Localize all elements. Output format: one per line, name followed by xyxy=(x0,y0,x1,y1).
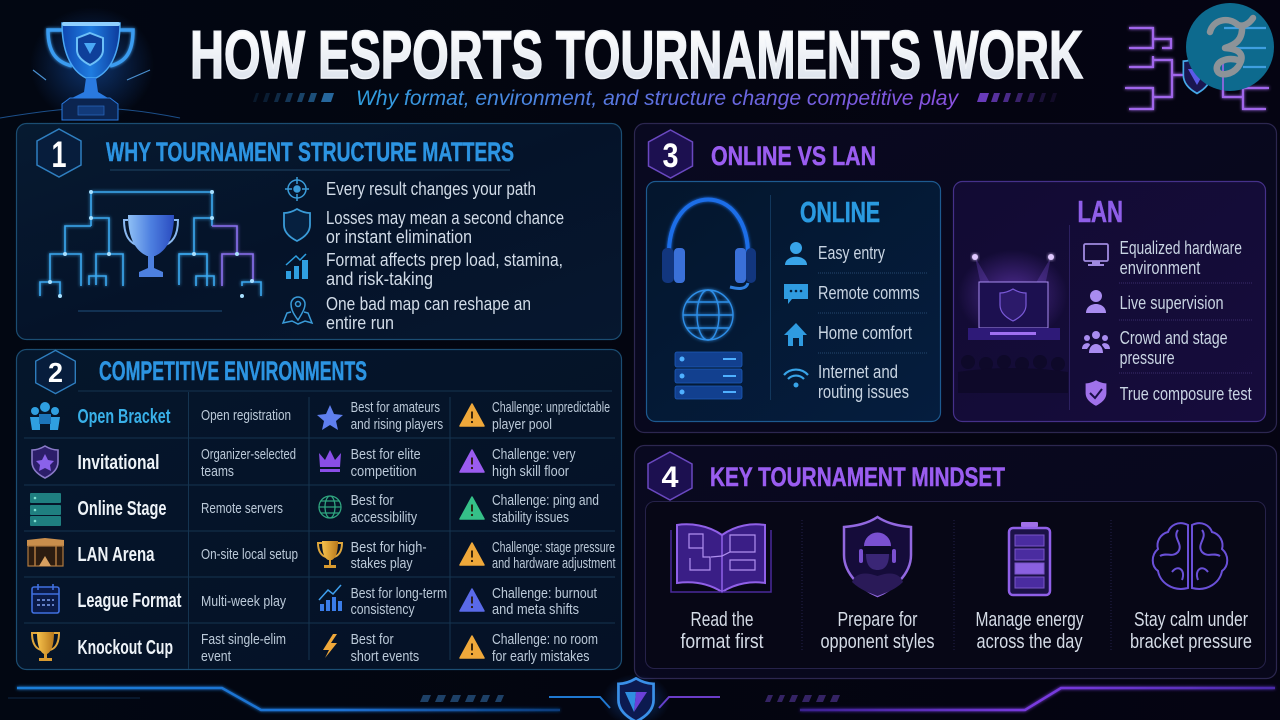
row: league format: Challenge: burnout xyxy=(492,585,598,602)
icon: header trophy xyxy=(0,7,180,123)
LAN item: crowd: pressure xyxy=(1120,348,1175,368)
row: invitational: Best for elite xyxy=(351,446,421,463)
decorative stripes right xyxy=(977,93,1057,102)
text: map: One bad map can reshape an xyxy=(326,293,531,314)
LAN item: crowd: Crowd and stage xyxy=(1120,328,1228,348)
row: LAN arena: stakes play xyxy=(351,555,413,572)
text: format: and risk-taking xyxy=(326,268,433,289)
badge 2 xyxy=(36,350,75,394)
icon: shield xyxy=(284,209,310,241)
icon: server stack xyxy=(30,493,61,526)
illustration: stage xyxy=(958,250,1068,393)
caption: stay calm: Stay calm under xyxy=(1134,608,1248,631)
icon: open book xyxy=(671,524,771,592)
online label: ONLINE xyxy=(800,197,880,229)
online item: internet xyxy=(784,362,909,402)
text: format xyxy=(326,249,563,289)
LAN item: crowd xyxy=(1082,328,1228,368)
caption: read the format: Read the xyxy=(690,608,754,631)
text: losses: Losses may mean a second chance xyxy=(326,207,564,228)
LAN item: composure: True composure test xyxy=(1120,384,1252,404)
panel 2: competitive environments xyxy=(16,350,622,670)
row: LAN arena: Best for high- xyxy=(351,539,427,556)
row: LAN arena: Challenge: stage pressure xyxy=(492,539,615,556)
footer bar xyxy=(8,674,1275,720)
row: invitational: teams xyxy=(201,463,234,480)
icon: star xyxy=(317,405,343,430)
LAN item: composure xyxy=(1086,380,1252,406)
icon: map pin xyxy=(283,297,312,324)
heading 3: ONLINE VS LAN xyxy=(711,141,876,171)
icon: arena building xyxy=(27,538,64,566)
row: online stage: Online Stage xyxy=(78,498,166,520)
text: map xyxy=(326,293,531,333)
card: LAN xyxy=(954,182,1266,422)
icon: players xyxy=(30,402,60,430)
icon: growth chart xyxy=(319,585,342,611)
row: LAN arena: and hardware adjustment xyxy=(492,555,616,572)
online item: internet: routing issues xyxy=(818,382,909,402)
row: open bracket: Best for amateurs xyxy=(351,399,440,416)
badge 1 xyxy=(37,129,81,177)
icon: gold cup xyxy=(32,632,59,661)
badge 2: 2 xyxy=(48,357,63,388)
row: LAN arena: On-site local setup xyxy=(201,546,298,563)
row: online stage xyxy=(30,492,599,526)
text: format: Format affects prep load, stamina, xyxy=(326,249,563,270)
icon: brain xyxy=(1153,523,1227,589)
caption: prepare xyxy=(820,608,934,653)
watermark logo xyxy=(1186,3,1274,97)
row: league format xyxy=(32,584,598,618)
caption: read the format xyxy=(680,608,764,653)
icon: header bracket xyxy=(1125,28,1269,109)
online item: home comfort xyxy=(784,323,912,346)
bracket diagram xyxy=(40,190,261,311)
icon: crown xyxy=(319,450,341,472)
LAN item: hardware: Equalized hardware xyxy=(1120,238,1242,258)
row: invitational: high skill floor xyxy=(492,463,569,480)
icon: calendar xyxy=(32,584,59,613)
icon: battery xyxy=(1009,522,1050,595)
online item: easy entry: Easy entry xyxy=(818,243,885,263)
row: open bracket: player pool xyxy=(492,416,552,433)
row: open bracket: Open Bracket xyxy=(78,406,171,428)
row: knockout cup: Challenge: no room xyxy=(492,631,598,648)
caption: stay calm xyxy=(1130,608,1252,653)
row: knockout cup: short events xyxy=(351,648,419,665)
bracket trophy xyxy=(124,215,178,277)
row: invitational: Invitational xyxy=(78,452,160,474)
header xyxy=(0,3,1274,123)
caption: prepare: opponent styles xyxy=(820,630,934,653)
icon: target xyxy=(285,177,309,201)
text: losses: or instant elimination xyxy=(326,226,472,247)
caption: manage: across the day xyxy=(976,630,1083,653)
row: knockout cup: Best for xyxy=(351,631,394,648)
heading 2: COMPETITIVE ENVIRONMENTS xyxy=(99,356,367,386)
caption: manage xyxy=(976,608,1084,653)
badge 3 xyxy=(648,130,692,178)
panel 1: why tournament structure matters xyxy=(16,124,622,340)
row: LAN arena: LAN Arena xyxy=(78,544,155,566)
online item: remote comms: Remote comms xyxy=(818,283,920,303)
caption: prepare: Prepare for xyxy=(838,608,918,631)
heading 4: KEY TOURNAMENT MINDSET xyxy=(710,462,1005,492)
row: online stage: stability issues xyxy=(492,509,569,526)
icon: gold trophy xyxy=(318,541,342,568)
online item: internet: Internet and xyxy=(818,362,898,382)
subtitle: Why format, environment, and structure change competitive play xyxy=(356,87,959,110)
caption: read the format: format first xyxy=(680,630,764,653)
LAN item: supervision xyxy=(1086,290,1224,313)
text: losses xyxy=(326,207,564,247)
bullet list 1 xyxy=(283,177,564,333)
row: invitational: Challenge: very xyxy=(492,446,576,463)
icon: lightning xyxy=(323,634,337,658)
LAN item: hardware xyxy=(1084,238,1242,278)
row: open bracket: and rising players xyxy=(351,416,443,433)
LAN item: supervision: Live supervision xyxy=(1120,293,1224,313)
icon: footer shield xyxy=(602,674,670,720)
badge 3: 3 xyxy=(662,137,678,175)
icon: header shield xyxy=(1183,57,1211,93)
row: knockout cup: event xyxy=(201,648,232,665)
row: open bracket: Open registration xyxy=(201,407,291,424)
card: online xyxy=(646,182,940,422)
row: knockout cup: Knockout Cup xyxy=(78,637,173,659)
row: open bracket: Challenge: unpredictable xyxy=(492,399,610,416)
row: knockout cup: for early mistakes xyxy=(492,648,590,665)
panel 3: online vs LAN xyxy=(634,124,1276,432)
online item: home comfort: Home comfort xyxy=(818,323,912,343)
icon: growth bars xyxy=(286,254,308,279)
row: online stage: Remote servers xyxy=(201,500,283,517)
illustration: globe xyxy=(683,290,733,340)
caption: manage: Manage energy xyxy=(976,608,1084,631)
icon: player shield xyxy=(844,517,911,596)
row: league format: League Format xyxy=(78,590,182,612)
LAN item: hardware: environment xyxy=(1120,258,1200,278)
panel 4: key tournament mindset xyxy=(634,446,1276,678)
row: league format: consistency xyxy=(351,601,415,618)
badge 4 xyxy=(648,452,692,500)
LAN label: LAN xyxy=(1078,194,1123,229)
text: map: entire run xyxy=(326,312,394,333)
heading 1: WHY TOURNAMENT STRUCTURE MATTERS xyxy=(106,137,514,167)
caption: stay calm: bracket pressure xyxy=(1130,630,1252,653)
icon: globe xyxy=(319,496,341,518)
row: knockout cup: Fast single-elim xyxy=(201,631,286,648)
row: league format: Multi-week play xyxy=(201,593,286,610)
row: online stage: Challenge: ping and xyxy=(492,492,599,509)
illustration: servers xyxy=(675,352,742,399)
row: league format: and meta shifts xyxy=(492,601,579,618)
icon: star shield xyxy=(32,446,58,478)
row: open bracket xyxy=(30,399,610,433)
row: invitational: competition xyxy=(351,463,417,480)
decorative stripes left xyxy=(253,93,334,102)
inner card xyxy=(646,502,1266,668)
badge 1: 1 xyxy=(52,134,66,175)
row: knockout cup xyxy=(32,631,598,665)
online item: remote comms xyxy=(784,283,920,304)
online item: easy entry xyxy=(785,242,885,265)
row: invitational xyxy=(32,446,576,480)
bullet list 1: Every result changes your path xyxy=(326,178,536,199)
illustration: headset xyxy=(662,200,756,288)
row: online stage: Best for xyxy=(351,492,394,509)
row: league format: Best for long-term xyxy=(351,585,447,602)
row: invitational: Organizer-selected xyxy=(201,446,296,463)
row: online stage: accessibility xyxy=(351,509,418,526)
badge 4: 4 xyxy=(662,461,679,494)
row: LAN arena xyxy=(27,538,616,572)
